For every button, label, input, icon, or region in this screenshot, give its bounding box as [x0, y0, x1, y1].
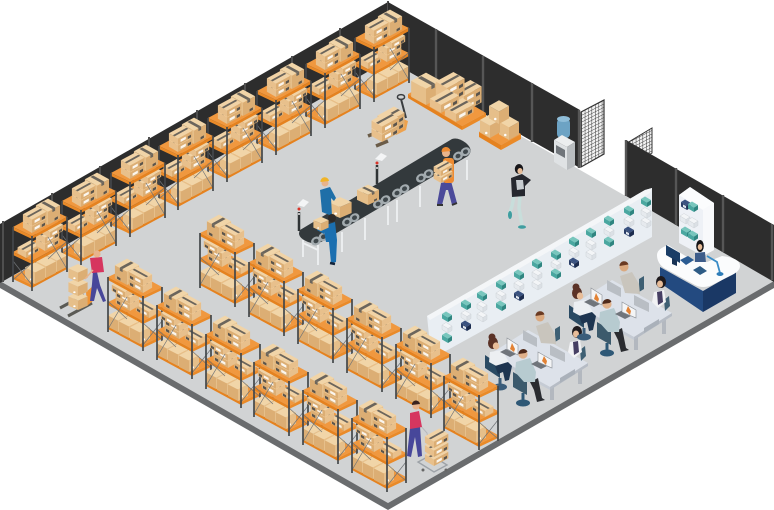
receptionist — [695, 240, 706, 263]
worker in blue with box — [313, 214, 337, 264]
flat box on belt — [357, 185, 379, 205]
keyboard — [680, 256, 694, 265]
white display shelf with products — [427, 188, 652, 352]
woman on the phone — [508, 164, 531, 229]
conveyor belt — [297, 138, 472, 265]
floor front edge — [0, 281, 774, 510]
small pallet with three boxes — [479, 100, 521, 150]
rack row middle — [200, 215, 498, 450]
sensor post left — [297, 199, 309, 231]
conveyor legs — [303, 160, 467, 265]
right wall segment — [626, 140, 774, 282]
desk front — [660, 267, 703, 312]
reception desk — [657, 240, 740, 312]
rollers — [309, 145, 472, 247]
worker with yellow hard hat — [320, 177, 336, 216]
back left wall — [0, 1, 388, 283]
belt surface — [299, 138, 471, 243]
rack row along back wall — [13, 10, 409, 291]
small mesh gate — [627, 128, 652, 168]
workstation group 2 — [569, 261, 672, 356]
worker in orange carrying boxes — [434, 147, 457, 205]
pallet truck with boxes — [368, 95, 408, 146]
sensor post right — [375, 153, 387, 184]
water cooler — [554, 116, 575, 170]
worker with hand cart — [407, 400, 448, 472]
pallet of boxes by wall — [408, 72, 486, 130]
white cabinet — [679, 187, 714, 256]
workstation group 1 — [485, 311, 588, 406]
worker with pallet truck — [60, 250, 106, 316]
main box on belt — [328, 197, 352, 218]
rack row front — [108, 259, 406, 492]
back right wall — [388, 2, 580, 168]
monitor — [666, 245, 680, 263]
desk lamp — [707, 256, 720, 273]
tall mesh gate — [581, 100, 604, 167]
counter top — [657, 245, 740, 287]
phone — [693, 266, 707, 275]
